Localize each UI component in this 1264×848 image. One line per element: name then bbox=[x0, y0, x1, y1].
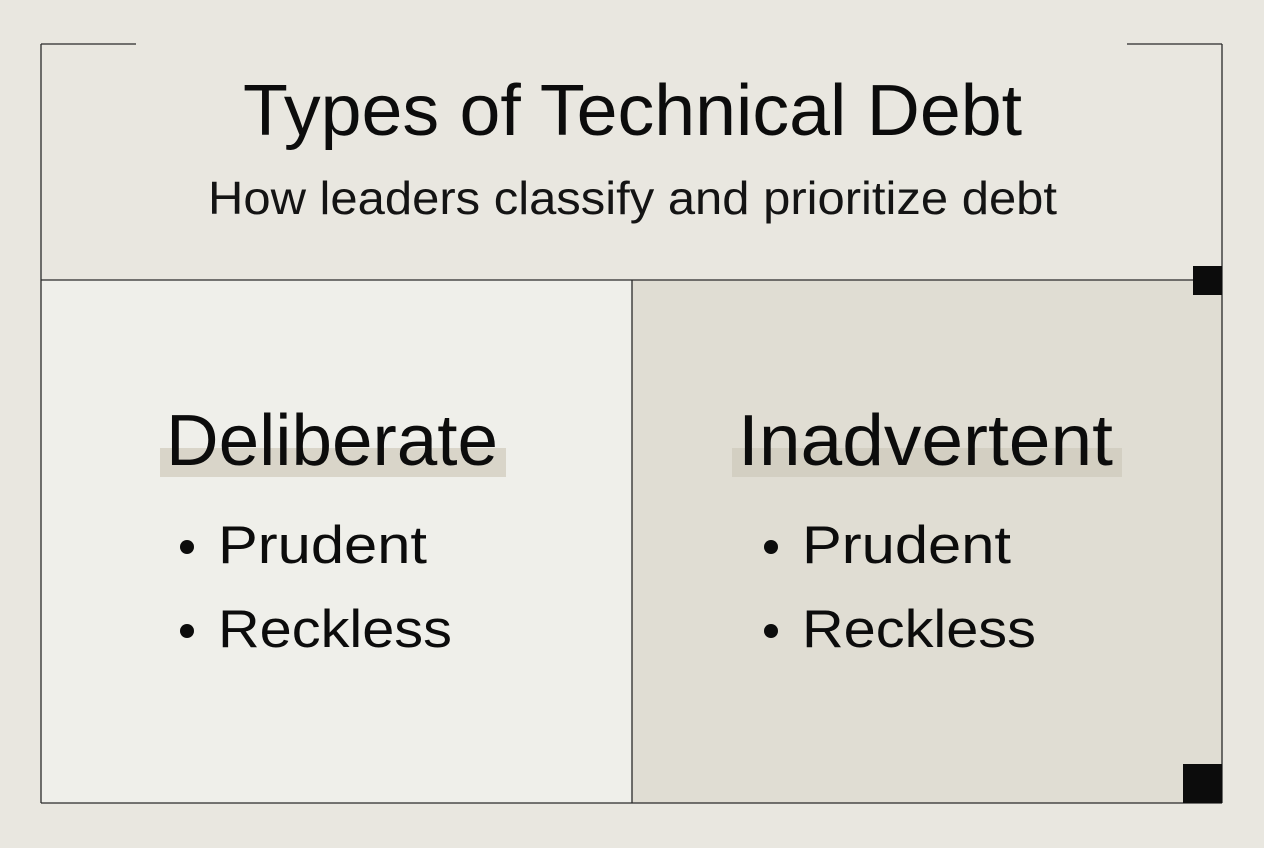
heading highlight: inadvertent bbox=[732, 448, 1122, 477]
icon: corner square top bbox=[1193, 266, 1222, 295]
icon: corner square bottom bbox=[1183, 764, 1222, 803]
bullet list: deliberate: Reckless bbox=[218, 600, 452, 659]
bullet list: inadvertent bbox=[764, 516, 1036, 659]
bullet list: deliberate: Prudent bbox=[218, 516, 427, 575]
panel: right inadvertent bbox=[632, 280, 1222, 803]
panel: left deliberate bbox=[41, 280, 632, 803]
bullet list: deliberate bbox=[180, 516, 452, 659]
bullet list: inadvertent: Prudent bbox=[802, 516, 1011, 575]
heading highlight: deliberate bbox=[160, 448, 506, 477]
subtitle: How leaders classify and prioritize debt bbox=[208, 172, 1057, 224]
title: Types of Technical Debt bbox=[243, 71, 1022, 151]
bullet list: inadvertent: Reckless bbox=[802, 600, 1036, 659]
heading: Deliberate: Deliberate bbox=[166, 401, 498, 481]
heading: Inadvertent: Inadvertent bbox=[738, 401, 1113, 481]
